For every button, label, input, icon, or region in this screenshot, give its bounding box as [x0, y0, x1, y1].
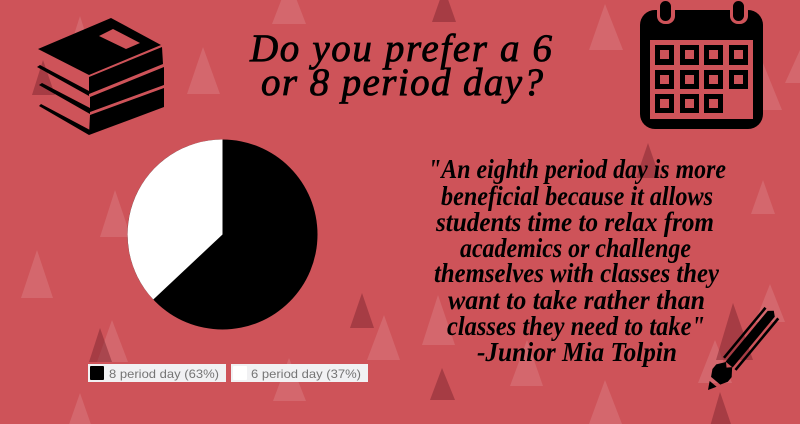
icon: stack of books	[37, 18, 164, 135]
icon: pencil	[700, 304, 781, 396]
icon: calendar	[640, 0, 763, 129]
title: or 8 period day?	[261, 61, 544, 104]
quote: themselves with classes they	[434, 258, 720, 288]
pie chart	[128, 140, 318, 330]
quote: students time to relax from	[435, 207, 714, 237]
legend	[88, 364, 368, 382]
title: Do you prefer a 6	[249, 27, 552, 70]
quote: beneficial because it allows	[441, 181, 713, 211]
legend: 8 period day (63%)	[109, 367, 219, 381]
quote: "An eighth period day is more	[428, 154, 726, 184]
quote	[428, 154, 726, 367]
quote: want to take rather than	[448, 285, 705, 315]
quote: academics or challenge	[460, 233, 691, 263]
title	[249, 27, 552, 104]
quote: classes they need to take"	[447, 311, 705, 341]
quote: -Junior Mia Tolpin	[477, 337, 677, 367]
legend: 6 period day (37%)	[251, 367, 361, 381]
